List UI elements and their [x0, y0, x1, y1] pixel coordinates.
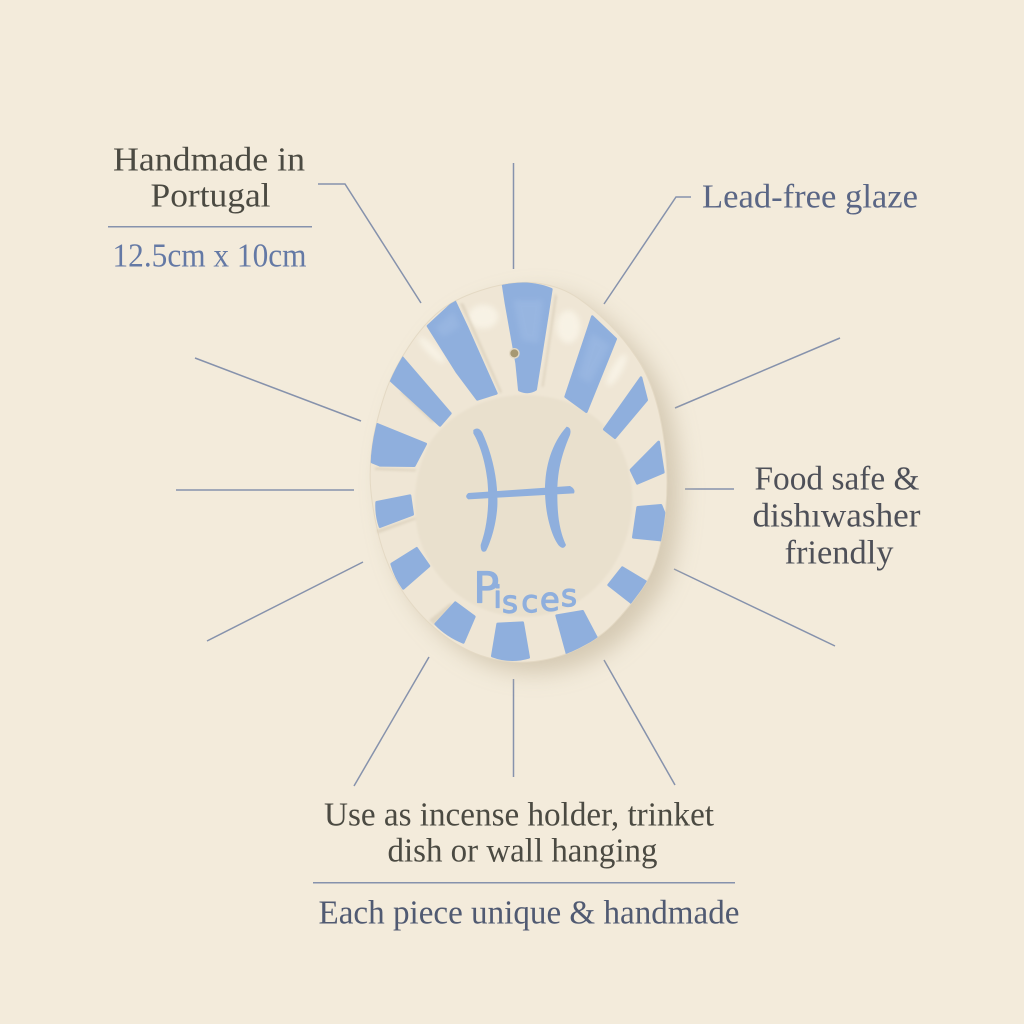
- glaze highlights: [415, 305, 630, 389]
- text: Food safe & dishwasher friendly: [752, 460, 921, 572]
- Pisces handwritten label: [473, 564, 577, 621]
- Pisces handwritten label: s: [502, 586, 518, 621]
- inner well: [415, 395, 632, 617]
- divider: bottom: [313, 882, 735, 884]
- blue glaze stripes: [372, 283, 664, 660]
- plate body: [370, 282, 667, 662]
- Pisces handwritten label: c: [521, 585, 538, 620]
- stripe shading: [435, 300, 610, 383]
- text: each piece unique: Each piece unique & handmade: [318, 894, 740, 932]
- text: Lead-free glaze: Lead-free glaze: [702, 178, 918, 216]
- text: dimensions: 12.5cm x 10cm: [112, 238, 306, 274]
- Pisces handwritten label: s: [561, 579, 577, 614]
- text: Handmade in Portugal: [113, 142, 305, 214]
- Pisces handwritten label: P: [473, 564, 499, 614]
- text: Food safe & dishwasher friendly: friendly: [784, 534, 894, 572]
- divider: left: [108, 226, 312, 228]
- text: use as incense holder: dish or wall hanging: [388, 832, 658, 870]
- Pisces handwritten label: i: [493, 580, 502, 615]
- text: use as incense holder: [324, 796, 715, 870]
- text: Food safe & dishwasher friendly: dishıwasher: [752, 498, 921, 534]
- text: Handmade in Portugal: Portugal: [150, 178, 270, 214]
- plate shadow: [383, 293, 680, 673]
- stripe grooves: [375, 293, 557, 625]
- text: Food safe & dishwasher friendly: Food safe &: [754, 460, 920, 498]
- Pisces symbol: [466, 427, 574, 552]
- text: use as incense holder: Use as incense holder, trinket: [324, 796, 715, 834]
- leader lines: [176, 163, 840, 786]
- plate: Pisces ceramic dish: [370, 282, 680, 673]
- hanging hole: [510, 349, 519, 358]
- Pisces handwritten label: e: [540, 581, 560, 619]
- text: Handmade in Portugal: Handmade in: [113, 142, 305, 178]
